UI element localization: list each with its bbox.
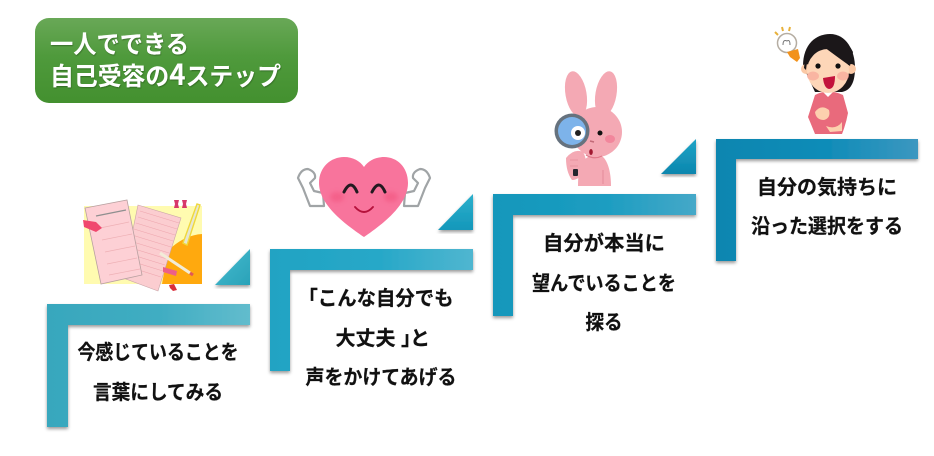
step 3 bracket (493, 194, 696, 316)
step 2 text: 「こんな自分でも (298, 282, 454, 311)
step 1 text: 今感じていることを (78, 336, 238, 365)
icon: woman with lightbulb (775, 27, 856, 134)
icon: rabbit with magnifying glass (554, 70, 622, 186)
step 4 text: 沿った選択をする (751, 210, 903, 239)
step 2 arrow triangle (438, 194, 473, 230)
title text: 自己受容の4ステップ (50, 52, 281, 94)
step 2 text: 」 (401, 322, 421, 351)
step 3 text: 自分が本当に (543, 227, 665, 256)
icon: heart mascot (298, 157, 430, 237)
step 2 text (298, 282, 456, 390)
title banner (35, 18, 298, 103)
icon: notebook pages (83, 200, 202, 291)
step 3 text: 探る (586, 306, 622, 335)
step 2 text: 大丈夫 (336, 322, 396, 351)
step 1 arrow triangle (215, 249, 250, 285)
title text (50, 25, 281, 94)
step 3 arrow triangle (661, 139, 696, 174)
step 3 text (532, 227, 676, 335)
step 4 text: 自分の気持ちに (757, 171, 897, 200)
step 1 bracket (47, 304, 250, 427)
step 4 text (751, 171, 903, 239)
step 2 bracket (270, 249, 473, 371)
step 1 text (78, 336, 238, 405)
step 2 text: 声をかけてあげる (306, 361, 456, 390)
step 2 text: と (410, 322, 430, 351)
step 3 text: 望んでいることを (532, 267, 676, 296)
title text: 一人でできる (50, 25, 189, 61)
step 1 text: 言葉にしてみる (93, 376, 223, 405)
step 4 bracket (716, 139, 918, 261)
